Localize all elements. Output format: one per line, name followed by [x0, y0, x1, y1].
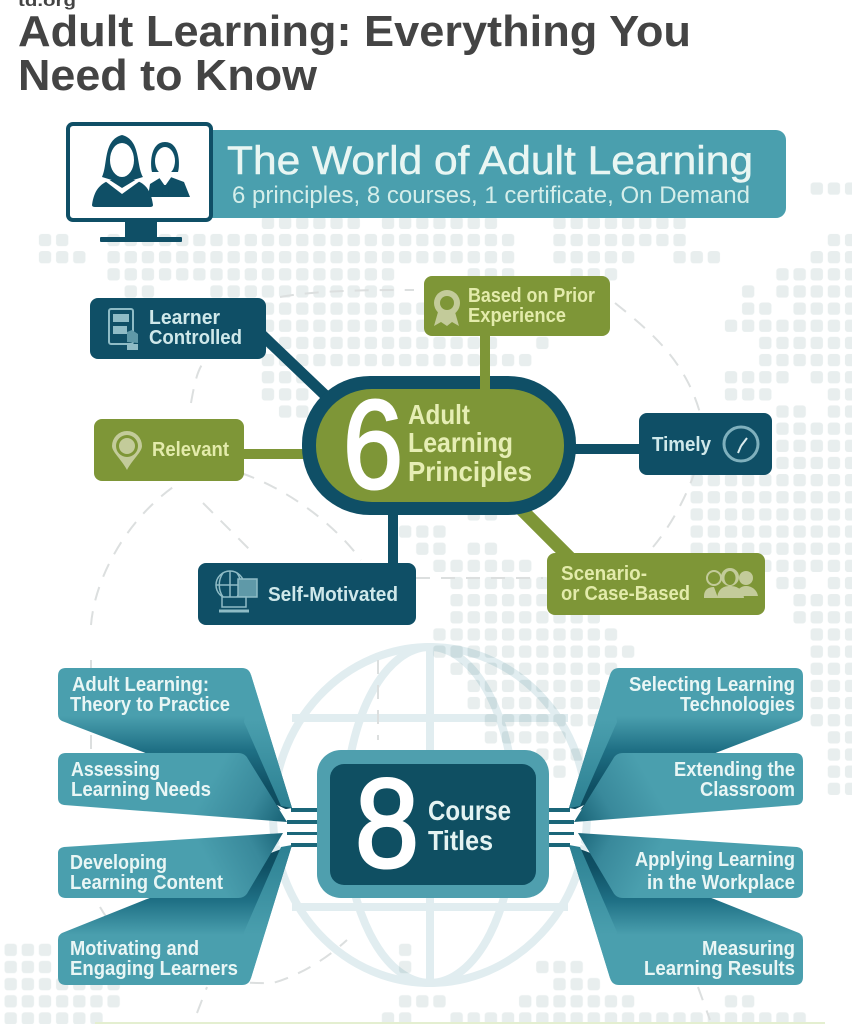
label: Learner	[149, 307, 220, 329]
fan 4	[569, 845, 803, 985]
course: Developing Learning Content: Developing	[70, 852, 167, 874]
course: Developing Learning Content: Learning Content	[70, 872, 223, 894]
course: Assessing Learning Needs: Learning Needs	[71, 779, 211, 801]
icon: tablet touch	[109, 309, 138, 350]
big number 8: 8	[355, 753, 419, 894]
course: Applying Learning in the Workplace: in the Workplace	[647, 872, 795, 894]
course titles: right	[629, 674, 795, 980]
page title: Need to Know	[18, 51, 318, 100]
course: Selecting Learning Technologies: Technologies	[680, 694, 795, 716]
hub label: Titles	[428, 825, 493, 856]
label: Relevant	[152, 439, 229, 461]
label: Experience	[468, 305, 566, 327]
fan 2	[574, 753, 803, 822]
icon: location pin	[112, 431, 142, 470]
course: Adult Learning: Theory to Practice: Adult Learning:	[72, 674, 209, 696]
icon: rosette	[434, 290, 460, 326]
hub label: Learning	[408, 427, 513, 458]
icon: clock	[724, 427, 758, 461]
course: Motivating and Engaging Learners: Motivating and	[70, 938, 199, 960]
banner subtitle: 6 principles, 8 courses, 1 certificate, On Demand	[232, 182, 750, 209]
background: globe	[273, 647, 587, 983]
connector stripes	[277, 805, 584, 847]
course: Measuring Learning Results: Measuring	[702, 938, 795, 960]
hub: 6 Adult Learning Principles	[302, 376, 576, 515]
course: Motivating and Engaging Learners: Engaging Learners	[70, 958, 238, 980]
left course fans	[58, 668, 292, 985]
hub: 8 Course Titles	[317, 750, 549, 898]
principle: Scenario- or Case-Based	[547, 553, 765, 615]
fan 1	[58, 668, 292, 810]
course: Extending the Classroom: Classroom	[700, 779, 795, 801]
course titles: left	[70, 674, 238, 980]
course: Measuring Learning Results: Learning Results	[644, 958, 795, 980]
icon: monitor with two learners	[68, 124, 211, 242]
background: dashed arcs	[91, 290, 710, 1020]
principle: Relevant	[94, 419, 244, 481]
course: Extending the Classroom: Extending the	[674, 759, 795, 781]
fan 4	[58, 845, 292, 985]
icon: globe and laptop	[216, 571, 257, 611]
course: Adult Learning: Theory to Practice: Theory to Practice	[70, 694, 230, 716]
fan 3	[578, 833, 803, 898]
banner heading: The World of Adult Learning	[227, 139, 753, 183]
fan 1	[569, 668, 803, 810]
connector lines	[240, 332, 645, 568]
hub label: Principles	[408, 456, 532, 487]
label: Self-Motivated	[268, 584, 398, 606]
principle: Timely	[639, 413, 772, 475]
label: Based on Prior	[468, 285, 595, 307]
course: Assessing Learning Needs: Assessing	[71, 759, 160, 781]
principle: Self-Motivated	[198, 563, 416, 625]
bottom edge line	[95, 1022, 825, 1024]
label: Scenario-	[561, 563, 647, 585]
course: Selecting Learning Technologies: Selecting Learning	[629, 674, 795, 696]
label: Controlled	[149, 327, 242, 349]
course: Applying Learning in the Workplace: Applying Learning	[635, 849, 795, 871]
hub label: Adult	[408, 399, 470, 430]
label: or Case-Based	[561, 583, 690, 605]
icon: three people	[704, 568, 758, 598]
banner: The World of Adult Learning	[190, 130, 786, 218]
right course fans	[569, 668, 803, 985]
principle: Based on Prior Experience	[424, 276, 610, 336]
hub label: Course	[428, 795, 511, 826]
label: Timely	[652, 434, 712, 456]
fan 2	[58, 753, 287, 822]
fan 3	[58, 833, 283, 898]
principle: Learner Controlled	[90, 298, 266, 359]
page title: Adult Learning: Everything You	[18, 7, 691, 56]
big number 6: 6	[343, 376, 403, 515]
